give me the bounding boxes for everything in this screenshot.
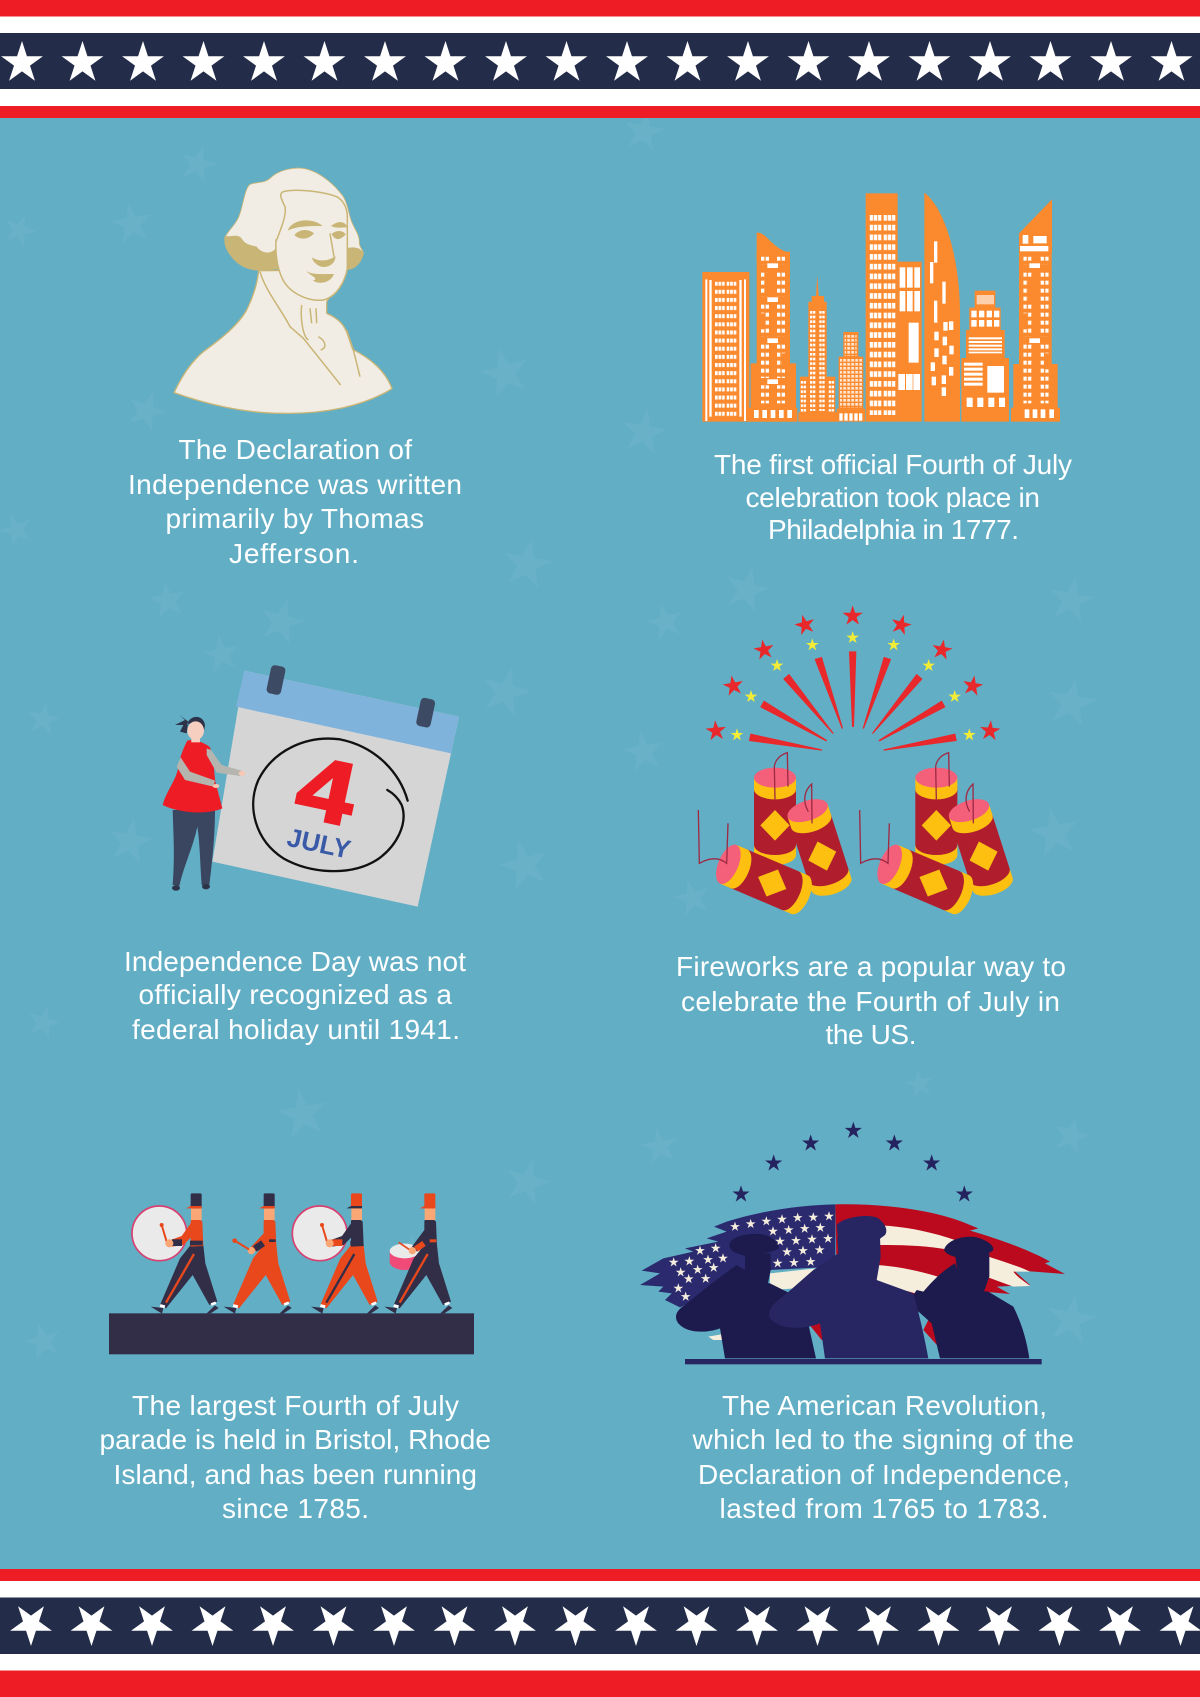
text: Jefferson fact: Independence was written — [128, 469, 462, 500]
text: Bristol parade fact: parade is held in Bristol, Rhode — [100, 1424, 491, 1455]
icon: calendar with person: JULY — [285, 822, 353, 865]
text: fireworks fact: Fireworks are a popular way to — [676, 951, 1066, 982]
text: Jefferson fact: Jefferson. — [229, 538, 359, 569]
drummer three — [292, 1193, 379, 1314]
text: federal holiday fact: Independence Day was not — [124, 946, 466, 977]
text: federal holiday fact: officially recognized as a — [138, 979, 452, 1010]
icon: city skyline — [702, 193, 1060, 422]
text: federal holiday fact: federal holiday until 1941. — [132, 1014, 460, 1045]
text: American Revolution fact — [692, 1390, 1074, 1524]
drummer one — [132, 1193, 219, 1314]
text: Philadelphia fact: celebration took place in — [746, 482, 1040, 513]
icon: marching band parade — [109, 1193, 474, 1354]
text: Philadelphia fact — [714, 449, 1072, 545]
text: Bristol parade fact — [100, 1390, 491, 1524]
background star pattern — [0, 107, 1100, 1362]
text: Bristol parade fact: since 1785. — [222, 1493, 369, 1524]
icon: fireworks and firecrackers — [698, 605, 1016, 918]
icon: saluting soldiers with flag — [640, 1122, 1065, 1364]
text: Jefferson fact: The Declaration of — [178, 434, 412, 465]
text: Bristol parade fact: Island, and has been running — [114, 1459, 477, 1490]
text: Bristol parade fact: The largest Fourth of July — [132, 1390, 459, 1421]
text: Jefferson fact — [128, 434, 462, 569]
text: federal holiday fact — [124, 946, 466, 1045]
text: fireworks fact — [676, 951, 1066, 1050]
text: American Revolution fact: which led to the signing of the — [692, 1424, 1074, 1455]
text: fireworks fact: celebrate the Fourth of July in — [681, 986, 1060, 1017]
icon: calendar with person — [163, 664, 459, 907]
text: Philadelphia fact: Philadelphia in 1777. — [768, 514, 1019, 545]
bottom border banner — [0, 1569, 1200, 1697]
icon: calendar with person: 4 — [288, 737, 365, 845]
top border banner — [0, 0, 1200, 118]
marcher two — [224, 1193, 292, 1314]
snare drummer four — [384, 1193, 452, 1314]
icon: portrait bust — [174, 168, 392, 413]
text: American Revolution fact: lasted from 1765 to 1783. — [720, 1493, 1048, 1524]
text: Philadelphia fact: The first official Fourth of July — [714, 449, 1072, 480]
text: Jefferson fact: primarily by Thomas — [166, 503, 424, 534]
text: American Revolution fact: The American Revolution, — [722, 1390, 1047, 1421]
text: fireworks fact: the US. — [826, 1019, 916, 1050]
text: American Revolution fact: Declaration of Independence, — [698, 1459, 1070, 1490]
